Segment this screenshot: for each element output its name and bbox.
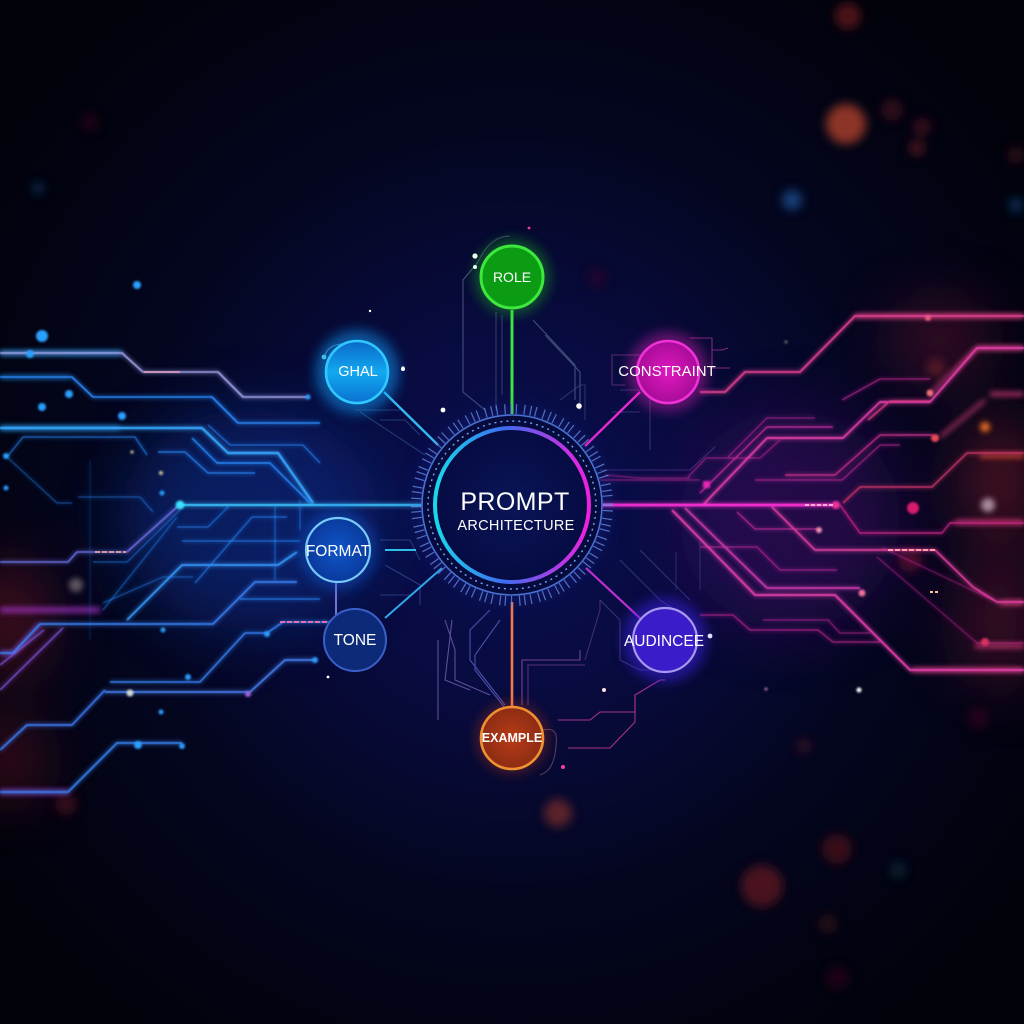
- circuit lines: right pink: [595, 315, 1024, 692]
- circuit lines: left blue: [0, 281, 432, 792]
- inner circuitry around hub: [325, 236, 730, 775]
- hub outer tick ring: [416, 409, 608, 601]
- connector: GOAL to hub: [384, 392, 438, 445]
- scattered sparks: [327, 227, 606, 769]
- node: TONE: TONE: [334, 632, 376, 649]
- node: GOAL: GHAL: [338, 364, 378, 380]
- node: TONE: [324, 609, 386, 671]
- connector: EXAMPLE to hub: [511, 602, 513, 706]
- node: GOAL: [315, 330, 405, 414]
- connector: FORMAT to hub: [385, 549, 416, 551]
- node: AUDIENCE: AUDINCEE: [624, 633, 704, 650]
- connector: TONE to hub: [385, 568, 442, 618]
- left dash highlight: [95, 372, 330, 622]
- left nodes: [3, 281, 318, 749]
- node: EXAMPLE: [476, 702, 548, 774]
- node: EXAMPLE: EXAMPLE: [482, 731, 542, 745]
- node: ROLE: [472, 239, 550, 315]
- node: FORMAT: FORMAT: [306, 543, 371, 560]
- connector: ROLE to hub: [510, 310, 514, 414]
- node: FORMAT: [298, 510, 378, 590]
- hub title: PROMPT: [460, 488, 570, 516]
- hub subtitle: ARCHITECTURE: [457, 518, 575, 534]
- node: AUDIENCE: [623, 598, 712, 682]
- connector: AUDIENCE to hub: [586, 568, 642, 620]
- right nodes: [703, 315, 989, 692]
- connector: CONSTRAINT to hub: [585, 392, 640, 446]
- hub glow: [424, 417, 600, 593]
- central hub: [416, 409, 608, 601]
- node: CONSTRAINT: CONSTRAINT: [618, 363, 716, 380]
- node: CONSTRAINT: [618, 332, 716, 412]
- node: ROLE: ROLE: [493, 269, 531, 285]
- hub main ring: [435, 428, 589, 582]
- connector: FORMAT to TONE: [335, 583, 337, 620]
